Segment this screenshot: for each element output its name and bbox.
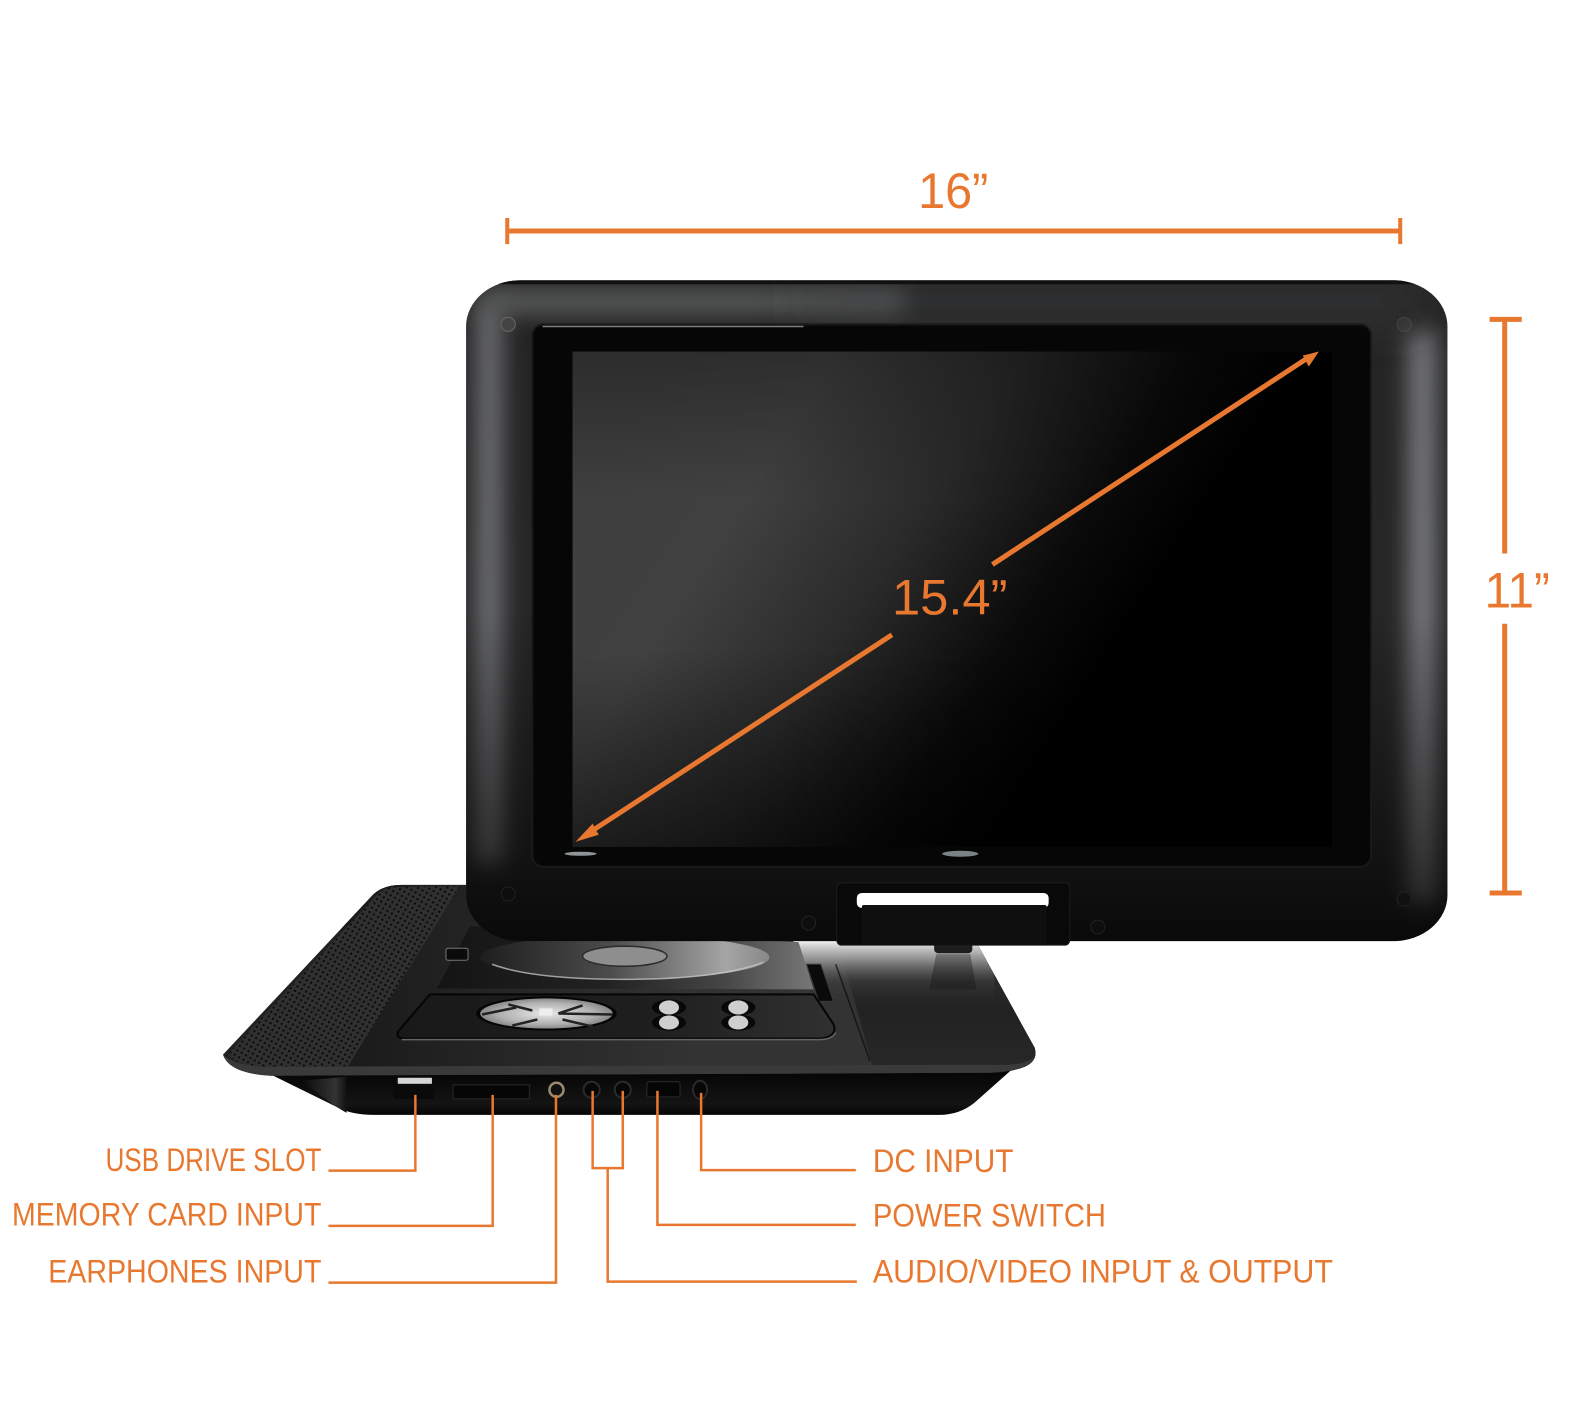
hinge post [934, 940, 972, 953]
handle recess [837, 883, 1070, 945]
callout: earphones input: EARPHONES INPUT [48, 1254, 321, 1290]
speaker grille [229, 886, 460, 1067]
screen vertical falloff [573, 352, 1332, 847]
av jack 1 [584, 1082, 600, 1098]
button: upper right [721, 999, 755, 1015]
handle slot [857, 893, 1049, 908]
earphone jack [549, 1083, 564, 1097]
button: lower right [721, 1014, 755, 1031]
base surface shading [342, 884, 1045, 1075]
callout: memory card input: MEMORY CARD INPUT [12, 1196, 321, 1232]
lid slider [807, 964, 834, 1001]
callout: dc input [701, 1093, 1014, 1179]
base front lip [223, 1053, 1036, 1076]
shell highlights [466, 280, 1447, 941]
button: upper left [652, 999, 686, 1015]
disc recess rim [492, 962, 763, 979]
hinge reflection [929, 954, 976, 989]
monitor [466, 280, 1447, 945]
navigation pad [476, 996, 617, 1031]
disc recess [480, 935, 769, 979]
front side highlight [301, 1077, 347, 1113]
dimension: width 16 inches: 16” [918, 163, 988, 219]
dimension: width 16 inches [507, 163, 1400, 244]
memory card slot [453, 1085, 529, 1099]
handle block [862, 905, 1047, 945]
dimension: screen diagonal 15.4 inches [576, 352, 1319, 842]
callout: audio/video input and output: AUDIO/VIDEO INPUT & OUTPUT [873, 1254, 1333, 1290]
screen frame [532, 324, 1371, 867]
screen frame top highlight [542, 325, 804, 327]
dimension: screen diagonal 15.4 inches: 15.4” [892, 570, 1007, 626]
screen [573, 352, 1332, 847]
right wing of the base [850, 946, 1036, 1071]
dc jack [693, 1081, 707, 1099]
power switch [647, 1082, 680, 1097]
usb port [394, 1077, 434, 1099]
button: lower left [652, 1014, 686, 1031]
base reflection haze [794, 941, 994, 986]
callout: usb drive slot [105, 1095, 415, 1178]
lid latch [446, 948, 468, 960]
dimension: height 11 inches [1485, 317, 1550, 893]
callout: power switch [657, 1091, 1106, 1233]
control panel lower rim [402, 1033, 836, 1040]
av jack 2 [615, 1082, 631, 1098]
disc lid [437, 926, 814, 989]
base top surface [223, 885, 1035, 1076]
right seam [836, 964, 870, 1061]
callout: memory card input [12, 1095, 493, 1232]
disc spindle [583, 946, 667, 966]
callout: audio/video input and output [593, 1091, 1333, 1290]
screen frame bottom glare [565, 851, 978, 857]
front edge with ports panel [263, 1071, 1010, 1115]
callout: power switch: POWER SWITCH [873, 1197, 1106, 1233]
monitor outer shell [466, 280, 1447, 941]
corner screws [501, 317, 1411, 934]
control panel [397, 994, 834, 1039]
callout: dc input: DC INPUT [873, 1143, 1014, 1179]
callout: earphones input [48, 1095, 556, 1290]
dimension: height 11 inches: 11” [1485, 563, 1550, 619]
callout: usb drive slot: USB DRIVE SLOT [105, 1142, 321, 1178]
dvd player base [223, 884, 1045, 1115]
